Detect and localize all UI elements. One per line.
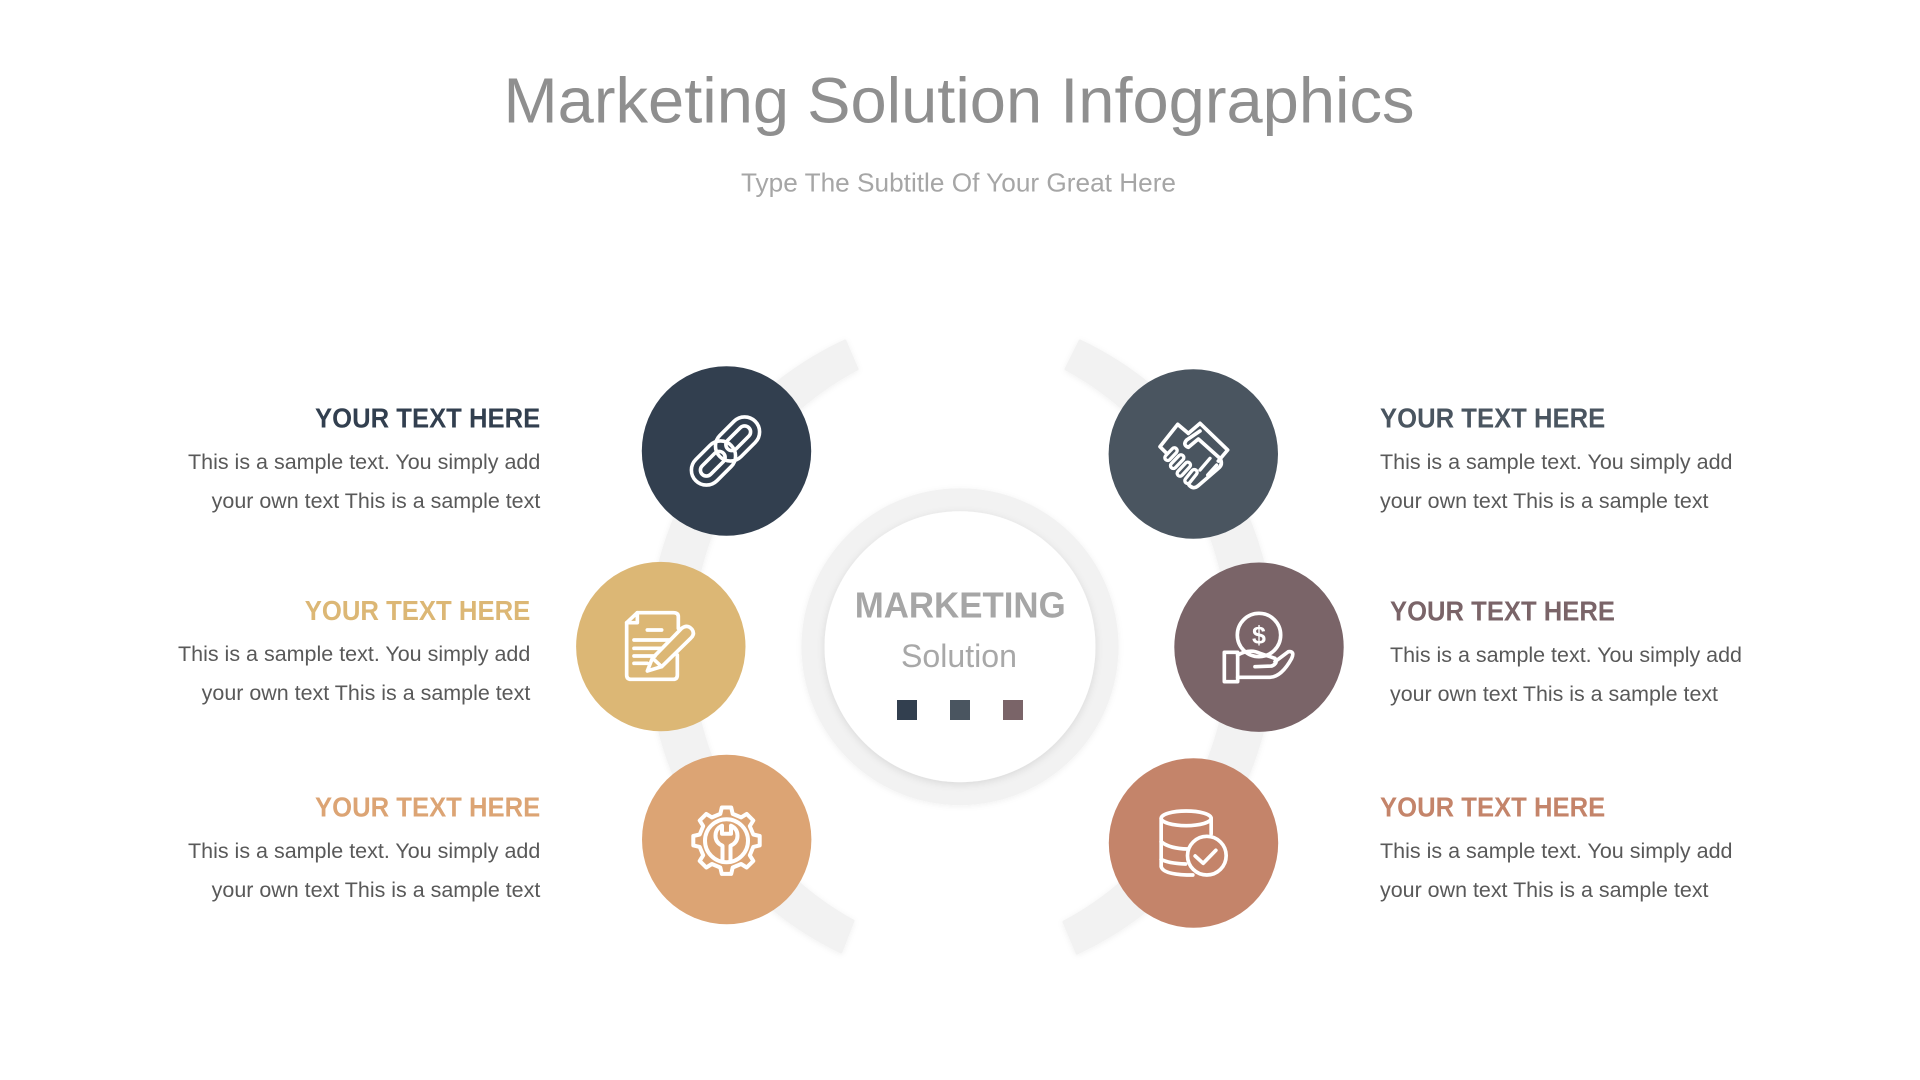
node: document [576,562,746,731]
text block: right middle [1390,596,1742,706]
body [178,643,530,705]
body: This is a sample text. You simply add [188,840,540,863]
body: your own text This is a sample text [212,879,540,902]
heading: YOUR TEXT HERE [315,792,540,822]
node: link [642,366,811,536]
hub heading: MARKETING [855,585,1066,626]
body: This is a sample text. You simply add [178,643,530,666]
text block: left bottom [188,792,540,902]
node: gear [642,755,811,924]
hub colour squares [897,700,1023,720]
right background arc [1064,341,1273,953]
icon: hand with coin [1224,613,1293,682]
icon: gear and wrench [693,808,760,874]
body [1380,451,1732,513]
icon: handshake [1160,423,1228,488]
node: database [1109,758,1278,928]
body: your own text This is a sample text [1380,490,1709,513]
body [188,451,540,513]
heading: YOUR TEXT HERE [305,595,530,626]
heading: YOUR TEXT HERE [1390,596,1615,626]
text block: left middle [178,595,530,705]
subtitle: Type The Subtitle Of Your Great Here [741,168,1176,198]
hub subheading: Solution [901,638,1017,674]
heading: YOUR TEXT HERE [1380,403,1605,434]
hub outer ring [802,488,1118,805]
body: This is a sample text. You simply add [1380,840,1732,863]
body: your own text This is a sample text [212,490,540,513]
text block: right top [1380,403,1732,513]
icon: hand with coin: $ [1252,622,1266,650]
body: your own text This is a sample text [1380,879,1709,902]
body: This is a sample text. You simply add [1390,644,1742,667]
text block: left top [188,403,540,513]
body: This is a sample text. You simply add [1380,451,1732,474]
body [1380,840,1732,902]
body: This is a sample text. You simply add [188,451,540,474]
left background arc [649,341,857,952]
heading: YOUR TEXT HERE [315,403,540,434]
title: Marketing Solution Infographics [504,65,1414,137]
body [1390,644,1742,706]
icon: document and pencil [627,613,693,679]
body: your own text This is a sample text [202,682,530,705]
body: your own text This is a sample text [1390,683,1718,706]
node: handshake [1109,369,1278,539]
hub inner disc [824,511,1096,782]
center hub [802,488,1118,805]
heading: YOUR TEXT HERE [1380,792,1605,822]
text block: right bottom [1380,792,1732,902]
icon: chain link [685,411,766,491]
node: money hand [1174,562,1344,732]
body [188,840,540,902]
icon: database check [1161,811,1226,875]
